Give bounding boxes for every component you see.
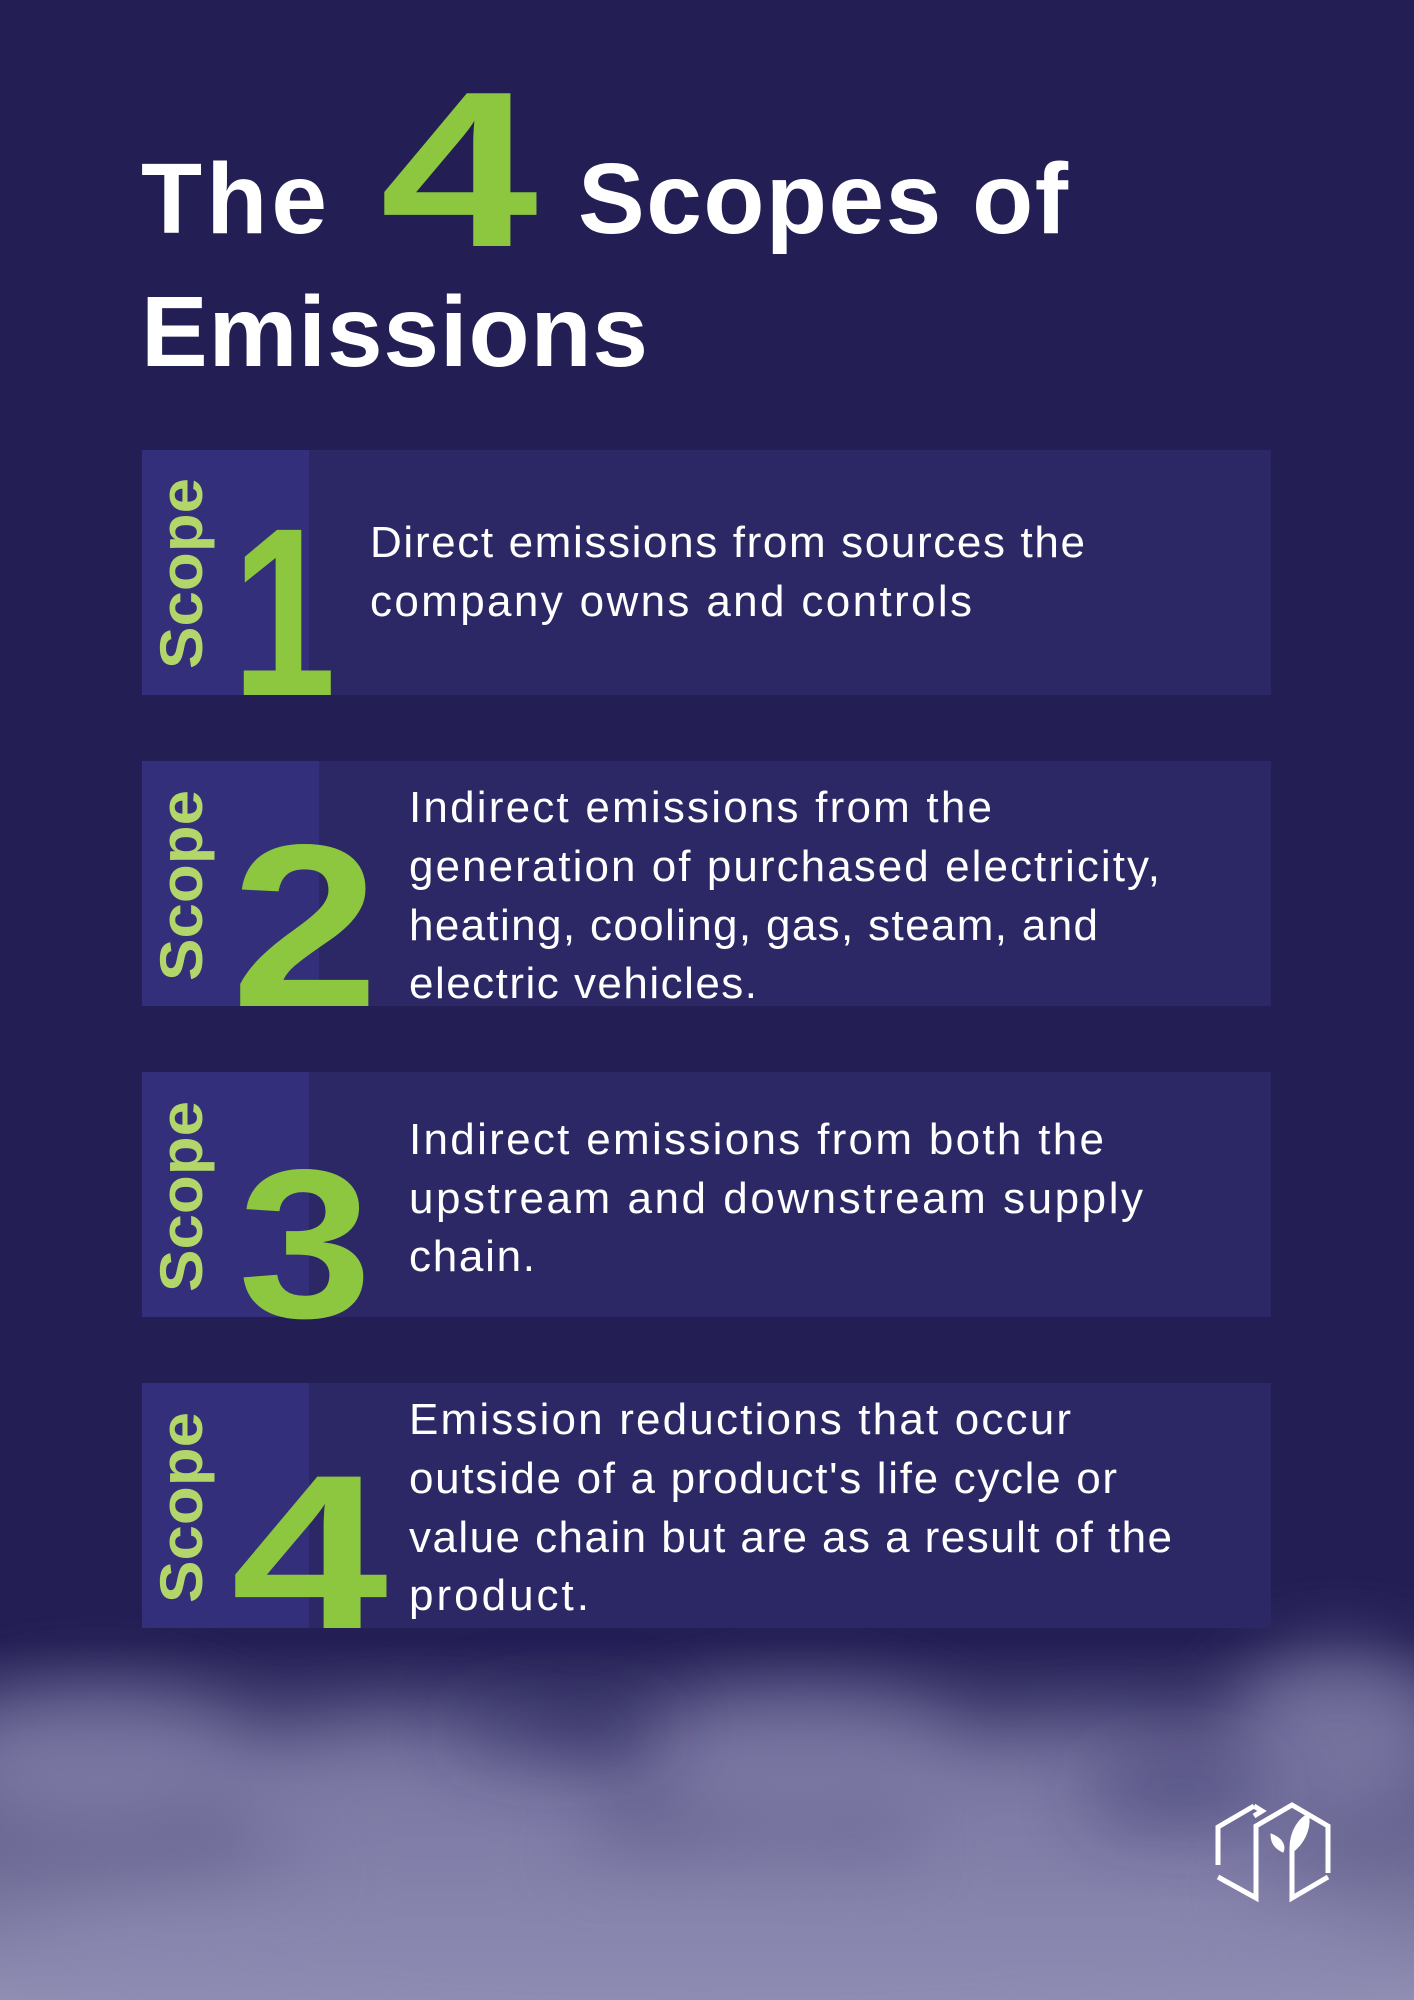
panel: scope 4: Emission reductions that occur: [409, 1395, 1071, 1444]
panel: scope 3: 3: [238, 1125, 372, 1362]
panel: scope 1: [142, 450, 1271, 746]
panel: scope 4: value chain but are as a result of the: [409, 1513, 1172, 1562]
panel: scope 3: Scope: [148, 1101, 215, 1292]
smoke background: [0, 1640, 1414, 2000]
panel: scope 2: heating, cooling, gas, steam, and: [409, 901, 1098, 950]
title: Scopes of: [578, 143, 1069, 255]
panel: scope 1: company owns and controls: [370, 577, 972, 626]
panel: scope 2: electric vehicles.: [409, 959, 757, 1008]
panel: scope 4: outside of a product's life cycle or: [409, 1454, 1117, 1503]
title: 4: [380, 46, 538, 294]
panel: scope 2: 2: [231, 797, 379, 1056]
icon: logo: [1218, 1805, 1328, 1898]
title: [141, 46, 1069, 388]
panel: scope 2: generation of purchased electricity,: [409, 842, 1160, 891]
panel: scope 2: Scope: [148, 790, 215, 981]
panel: scope 2: [142, 761, 1271, 1056]
panel: scope 3: Indirect emissions from both the: [409, 1115, 1104, 1164]
panel: scope 4: Scope: [148, 1412, 215, 1603]
panel: scope 4: 4: [231, 1429, 388, 1675]
title: The: [141, 143, 327, 255]
panel: scope 3: [142, 1072, 1271, 1362]
panel: scope 1: Direct emissions from sources the: [370, 518, 1085, 567]
panel: scope 4: product.: [409, 1571, 589, 1620]
panel: scope 3: chain.: [409, 1232, 535, 1281]
panel: scope 2: Indirect emissions from the: [409, 783, 992, 832]
panel: scope 1: Scope: [148, 478, 215, 669]
title: Emissions: [141, 276, 648, 388]
panel: scope 1: 1: [232, 478, 336, 746]
panel: scope 4: [142, 1383, 1271, 1675]
panel: scope 3: upstream and downstream supply: [409, 1174, 1143, 1223]
